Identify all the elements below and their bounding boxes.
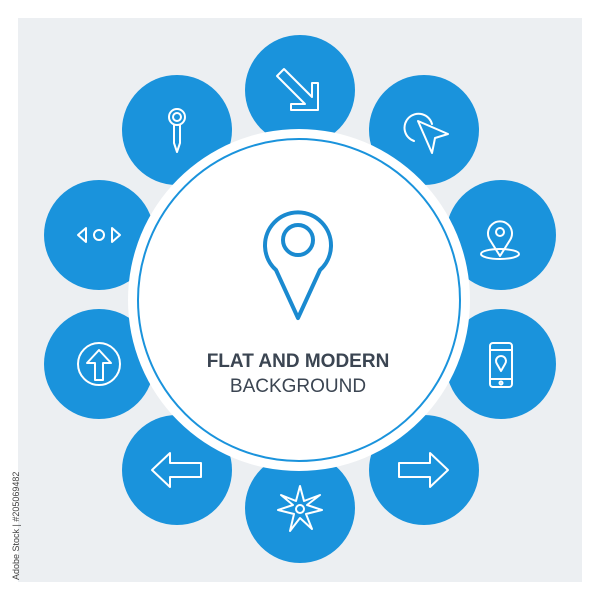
circle: left upper xyxy=(44,180,154,290)
icon: diagonal arrow xyxy=(277,69,318,110)
icon: cursor click xyxy=(405,114,448,153)
circle: bottom-right xyxy=(369,415,479,525)
circle: right lower xyxy=(446,309,556,419)
subheading: BACKGROUND xyxy=(230,376,366,397)
heading: FLAT AND MODERN xyxy=(207,351,389,372)
icon: compass rose xyxy=(278,486,322,531)
icon: up arrow in circle xyxy=(78,343,120,385)
icon: right arrow xyxy=(399,453,448,487)
circle: left lower xyxy=(44,309,154,419)
circle: top-left xyxy=(122,75,232,185)
icon: left arrow xyxy=(152,453,201,487)
circle: top-right xyxy=(369,75,479,185)
circle: bottom-left xyxy=(122,415,232,525)
central circle xyxy=(128,129,470,471)
circle: bottom xyxy=(245,453,355,563)
side caption: Adobe Stock | #205069482 xyxy=(11,472,21,580)
circle: top xyxy=(245,35,355,145)
icon: push pin xyxy=(169,109,185,152)
icon: central map pin xyxy=(265,212,331,318)
icon: location pin on map xyxy=(481,221,519,259)
icon: phone with pin xyxy=(490,343,512,387)
icon: arrows left right xyxy=(78,228,120,242)
circle: right upper xyxy=(446,180,556,290)
